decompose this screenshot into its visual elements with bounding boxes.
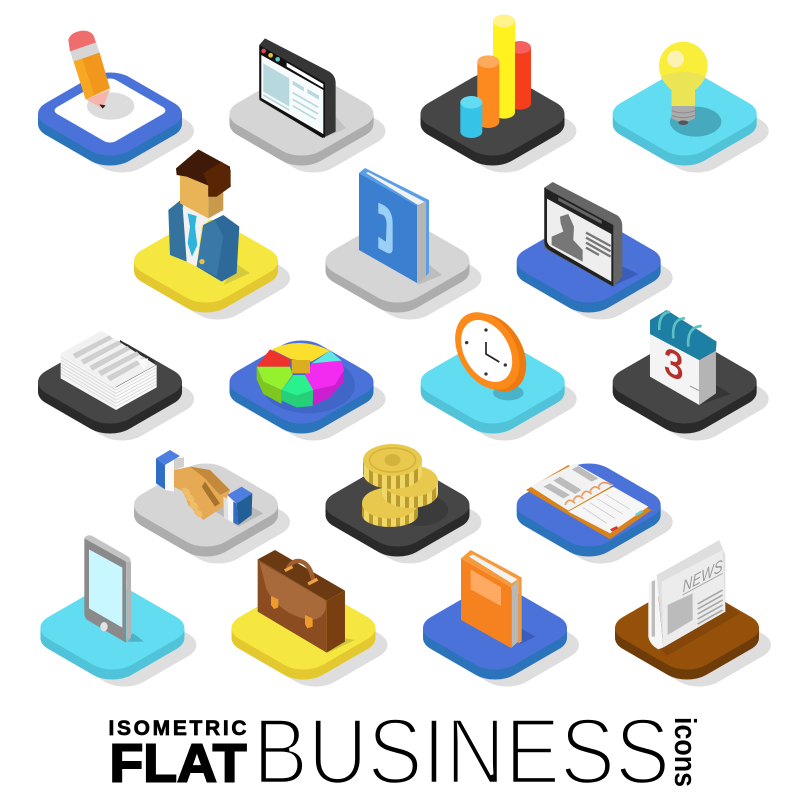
tile with blue phone book icon bbox=[314, 168, 493, 326]
businessman bbox=[168, 149, 250, 285]
briefcase bbox=[258, 550, 355, 653]
tile with pencil icon bbox=[27, 31, 205, 179]
tile with handshake icon bbox=[123, 450, 301, 570]
tile with wall clock icon bbox=[410, 301, 588, 447]
browser window bbox=[259, 38, 346, 138]
tile with gold coins icon bbox=[314, 444, 493, 570]
tile with briefcase icon bbox=[220, 550, 399, 693]
newspaper bbox=[648, 540, 740, 656]
stack of papers bbox=[61, 331, 157, 410]
wall clock bbox=[442, 301, 539, 403]
smartphone bbox=[84, 535, 144, 643]
desk calendar bbox=[650, 310, 731, 405]
tile with businessman icon bbox=[123, 149, 301, 326]
tile with pie chart icon bbox=[218, 334, 397, 447]
ID card bbox=[544, 182, 638, 287]
tile with smartphone icon bbox=[29, 535, 208, 693]
handshake bbox=[156, 450, 263, 527]
title word: icons: icons bbox=[668, 717, 703, 787]
newspaper headline: NEWS bbox=[683, 556, 723, 596]
tile with spiral notebook icon bbox=[506, 457, 684, 570]
tile with light bulb icon bbox=[602, 42, 780, 179]
stack of gold coins bbox=[362, 444, 448, 527]
tile with calendar icon bbox=[602, 310, 780, 447]
tile with browser window icon bbox=[218, 38, 397, 179]
cylinder bar chart bbox=[460, 15, 531, 138]
spiral notebook bbox=[526, 463, 652, 539]
tile with bar chart icon bbox=[409, 15, 588, 179]
tile with ID card icon bbox=[506, 182, 684, 326]
3D pie chart bbox=[257, 343, 355, 413]
light bulb bbox=[659, 42, 721, 137]
phone book bbox=[359, 168, 442, 285]
tile with orange book icon bbox=[412, 550, 590, 693]
orange book bbox=[461, 550, 536, 648]
calendar number: 3 bbox=[664, 340, 683, 390]
title word: FLAT: FLAT bbox=[110, 734, 247, 794]
title word: ISOMETRIC: ISOMETRIC bbox=[108, 717, 246, 740]
title: Isometric Flat Business Icons bbox=[108, 698, 703, 800]
pencil bbox=[68, 31, 134, 120]
icon: telephone handset bbox=[378, 203, 393, 253]
tile with paper stack icon bbox=[27, 331, 205, 447]
tile with newspaper icon bbox=[604, 540, 782, 693]
